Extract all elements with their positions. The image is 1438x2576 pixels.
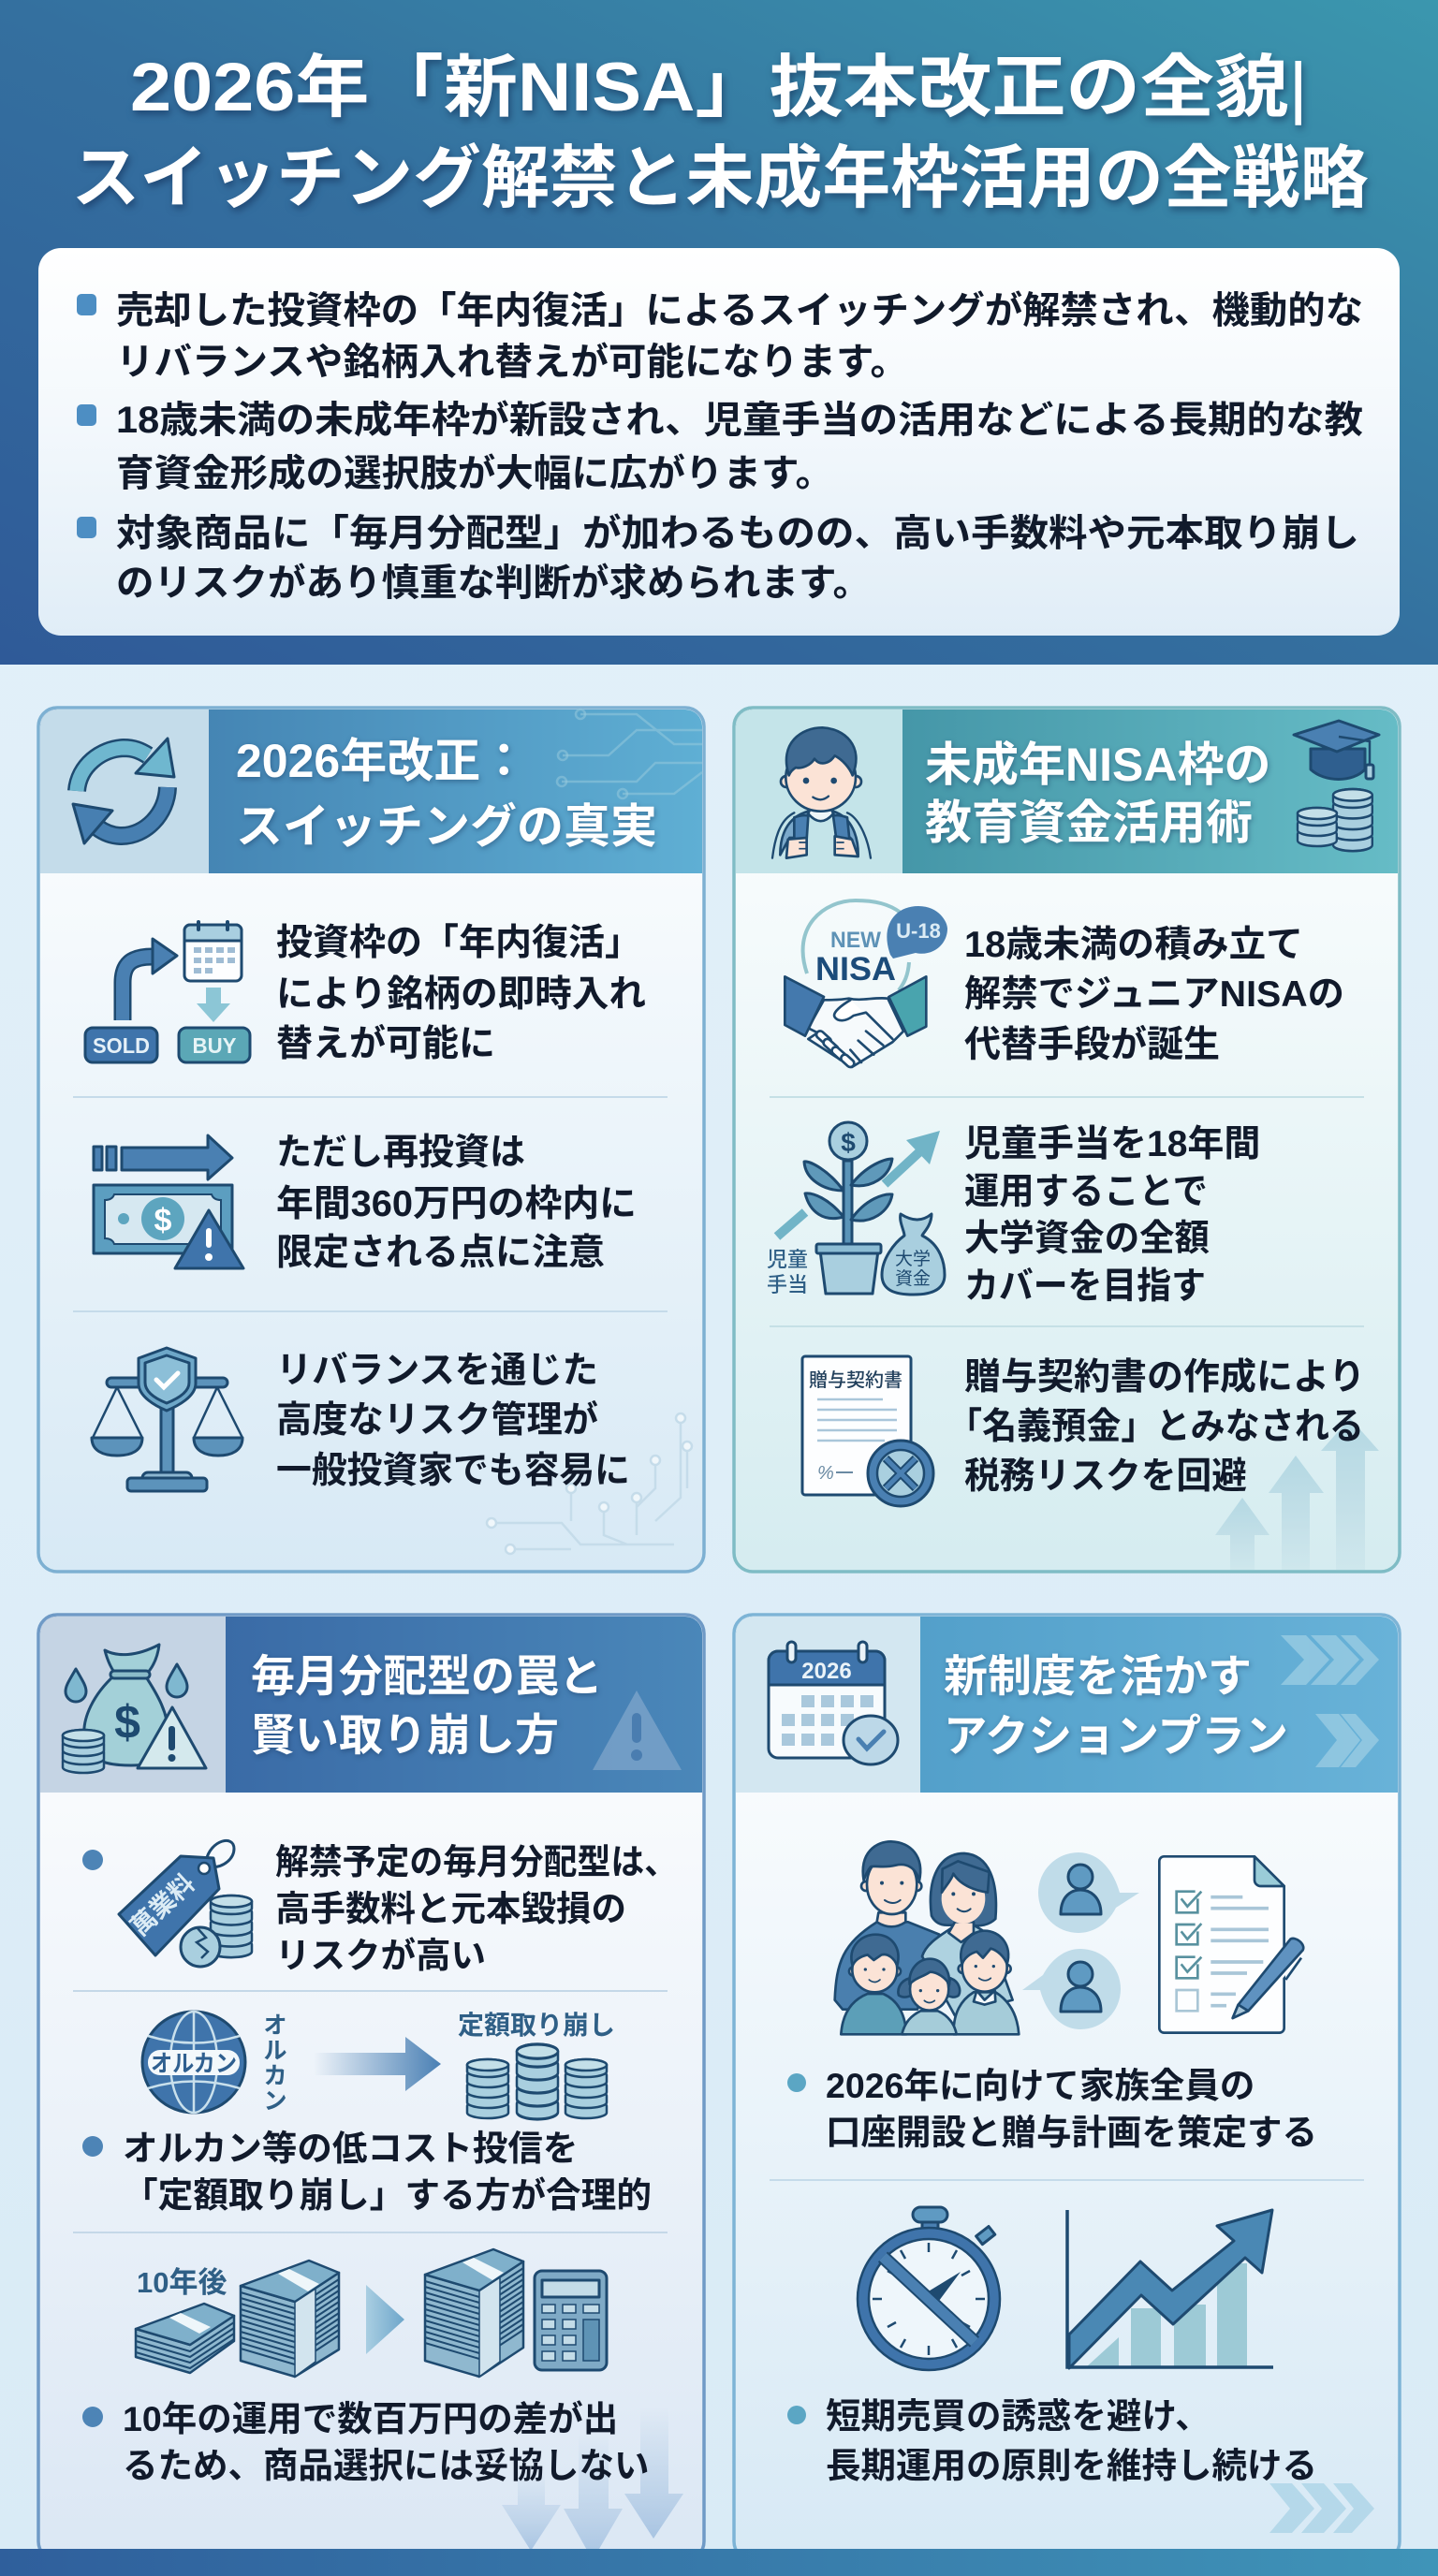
summary point 1: リバランスや銘柄入れ替えが可能になります。: [116, 342, 908, 383]
icon: cash stacks and calculator: [136, 2249, 607, 2377]
bottom-right chevrons: [1269, 2483, 1374, 2533]
item: low cost all-country: 「定額取り崩し」する方が合理的: [123, 2175, 652, 2215]
summary point 1: [77, 290, 1363, 383]
title: 2026年「新NISA」抜本改正の全貌 |: [130, 50, 1308, 125]
item: high fee risk: 解禁予定の毎月分配型は、: [275, 1842, 678, 1881]
title: スイッチング解禁と未成年枠活用の全戦略: [71, 140, 1369, 216]
icon: fee tag and coins: [119, 1840, 252, 1967]
summary point 3: のリスクがあり慎重な判断が求められます。: [116, 563, 871, 604]
bottom-right down arrows: [502, 2408, 683, 2560]
icon: boy with backpack: [772, 727, 871, 858]
summary point 3: 対象商品に「毎月分配型」が加わるものの、高い手数料や元本取り崩し: [116, 513, 1359, 554]
icon: prohibited stopwatch: [858, 2207, 1000, 2370]
icon: globe to coins: カ: [263, 2063, 287, 2089]
icon: globe to coins: ル: [263, 2038, 287, 2064]
item: annual limit: 限定される点に注意: [276, 1233, 605, 1273]
icon: globe to coins: オルカン: [151, 2051, 237, 2077]
item: family planning: [835, 1841, 1304, 2034]
summary point 1: 売却した投資枠の「年内復活」によるスイッチングが解禁され、機動的な: [116, 290, 1363, 331]
item: long-term stance: [787, 2207, 1317, 2485]
item: long-term stance: 長期運用の原則を維持し続ける: [826, 2446, 1317, 2485]
icon: money plant growth: 児童: [767, 1248, 808, 1271]
icon: sold buy calendar: [85, 920, 250, 1062]
circuit decoration: [487, 1413, 692, 1554]
header band: [0, 0, 1438, 665]
item: annual limit: 年間360万円の枠内に: [276, 1184, 637, 1224]
summary point 2: 育資金形成の選択肢が大幅に広がります。: [116, 453, 833, 494]
icon: sold buy calendar: BUY: [193, 1033, 236, 1058]
icon: globe to coins: [142, 2011, 615, 2119]
older boy: [841, 1935, 906, 2034]
item: child allowance: [767, 1122, 1260, 1307]
icon: gift contract document: %: [817, 1463, 834, 1484]
panel: 2026 reform switching: [38, 708, 704, 1572]
icon: cap and coins: [1294, 721, 1379, 851]
icon: fee tag and coins: 萬業料: [125, 1869, 200, 1941]
icon: money plant growth: 手当: [767, 1273, 808, 1296]
icon: new NISA handshake: NEW: [830, 928, 881, 953]
icon: money plant growth: [767, 1122, 945, 1296]
bottom band: [0, 2549, 1438, 2576]
younger boy: [953, 1931, 1019, 2034]
item: gift contract: 贈与契約書の作成により: [964, 1357, 1365, 1398]
item: annual limit: ただし再投資は: [276, 1133, 525, 1173]
heading: minor NISA: 教育資金活用術: [925, 797, 1253, 849]
icon: family: [835, 1841, 1019, 2034]
icon: bill arrow warning: [94, 1135, 243, 1268]
item: year-end revival: により銘柄の即時入れ: [276, 974, 646, 1015]
heading: action plan: [944, 1651, 1288, 1761]
panel: action plan: 口座開設と贈与計画を策定する: [826, 2113, 1317, 2152]
summary point 2: 18歳未満の未成年枠が新設され、児童手当の活用などによる長期的な教: [116, 400, 1363, 441]
item: long-term stance: 短期売買の誘惑を避け、: [826, 2396, 1211, 2436]
item: high fee risk: [82, 1840, 678, 1975]
panel: action plan: [734, 1615, 1400, 2560]
girl: [898, 1959, 960, 2034]
icon: consult bubbles: [1022, 1852, 1139, 2029]
icon: gift contract document: 贈与契約書: [809, 1369, 902, 1391]
icon: money bag warning: [63, 1645, 206, 1773]
icon: checklist and pen: [1159, 1856, 1304, 2033]
mother: [922, 1853, 1013, 2015]
item: risk management: 高度なリスク管理が: [276, 1400, 598, 1441]
icon: globe to coins: オ: [263, 2012, 287, 2039]
item: gift contract: 「名義預金」とみなされる: [947, 1407, 1364, 1447]
item: junior NISA replacement: 代替手段が誕生: [964, 1025, 1220, 1065]
heading: action plan: 新制度を活かす: [944, 1651, 1252, 1701]
item: gift contract: 税務リスクを回避: [964, 1456, 1247, 1497]
item: child allowance: 児童手当を18年間: [964, 1124, 1260, 1164]
item: annual limit: [94, 1133, 637, 1273]
icon: money bag warning: $: [114, 1696, 140, 1749]
heading: switching truth: 2026年改正：: [236, 735, 527, 787]
icon: cash stacks and calculator: 10年後: [137, 2266, 227, 2299]
item: high fee risk: リスクが高い: [275, 1936, 486, 1975]
summary point 3: [77, 513, 1359, 604]
heading: minor NISA: [925, 739, 1270, 849]
icon: new NISA handshake: NISA: [815, 951, 896, 988]
father: [835, 1841, 939, 2010]
item: low cost all-country: オルカン等の低コスト投信を: [123, 2129, 578, 2168]
panel: minor NISA education funds: [734, 708, 1400, 1572]
icon: circular arrows: [73, 739, 174, 843]
item: child allowance: 大学資金の全額: [964, 1219, 1210, 1259]
item: risk management: 一般投資家でも容易に: [276, 1451, 630, 1491]
heading: switching truth: スイッチングの真実: [236, 800, 657, 853]
heading: monthly distribution: [251, 1651, 603, 1760]
item: high fee risk: 高手数料と元本毀損の: [275, 1889, 626, 1928]
panel: action plan: 2026年に向けて家族全員の: [826, 2066, 1255, 2105]
panel: monthly distribution trap: [38, 1615, 704, 2560]
title: [71, 50, 1369, 216]
icon: 2026 calendar: [769, 1642, 898, 1764]
panel header: switching: [40, 710, 702, 873]
heading: minor NISA: 未成年NISA枠の: [925, 739, 1270, 791]
heading: monthly distribution: 毎月分配型の罠と: [251, 1651, 603, 1701]
icon: gift contract document: [802, 1356, 933, 1506]
summary panel: [38, 248, 1400, 636]
heading: switching truth: [236, 735, 657, 853]
item: long-term difference: [82, 2249, 650, 2485]
icon: scales with shield: [92, 1348, 242, 1491]
summary point 2: [77, 400, 1363, 494]
heading: action plan: アクションプラン: [944, 1711, 1288, 1761]
icon: money plant growth: 資金: [895, 1268, 931, 1289]
icon: globe to coins: 定額取り崩し: [458, 2011, 615, 2040]
panel header: minor NISA: [736, 710, 1398, 873]
icon: new NISA handshake: U-18: [896, 919, 941, 943]
icon: sold buy calendar: SOLD: [93, 1033, 150, 1058]
item: junior NISA replacement: 解禁でジュニアNISAの: [964, 974, 1344, 1015]
item: long-term difference: 10年の運用で数百万円の差が出: [123, 2399, 618, 2438]
item: risk management: リバランスを通じた: [276, 1351, 598, 1391]
item: year-end revival: [85, 920, 646, 1064]
panel header: monthly distribution: [40, 1617, 702, 1793]
item: gift contract: [802, 1356, 1365, 1506]
item: child allowance: カバーを目指す: [964, 1266, 1206, 1307]
item: junior NISA replacement: 18歳未満の積み立て: [964, 925, 1303, 965]
icon: bill arrow warning: $: [154, 1203, 172, 1238]
item: year-end revival: 替えが可能に: [276, 1024, 495, 1064]
icon: new NISA handshake: [785, 900, 947, 1069]
item: junior NISA replacement: [785, 900, 1344, 1069]
icon: growth chart: [1067, 2210, 1273, 2368]
item: long-term difference: るため、商品選択には妥協しない: [123, 2446, 650, 2485]
item: year-end revival: 投資枠の「年内復活」: [276, 923, 641, 963]
icon: 2026 calendar: 2026: [801, 1659, 852, 1684]
item: child allowance: 運用することで: [964, 1172, 1208, 1212]
item: risk management: [92, 1348, 630, 1491]
icon: money plant growth: $: [841, 1128, 856, 1157]
icon: money plant growth: 大学: [895, 1249, 931, 1269]
bottom-right up arrows: [1215, 1418, 1379, 1570]
heading: monthly distribution: 賢い取り崩し方: [251, 1710, 559, 1760]
panel header: action plan: [736, 1617, 1398, 1793]
icon: globe to coins: ン: [263, 2088, 287, 2115]
item: low cost all-country: [82, 2011, 652, 2215]
